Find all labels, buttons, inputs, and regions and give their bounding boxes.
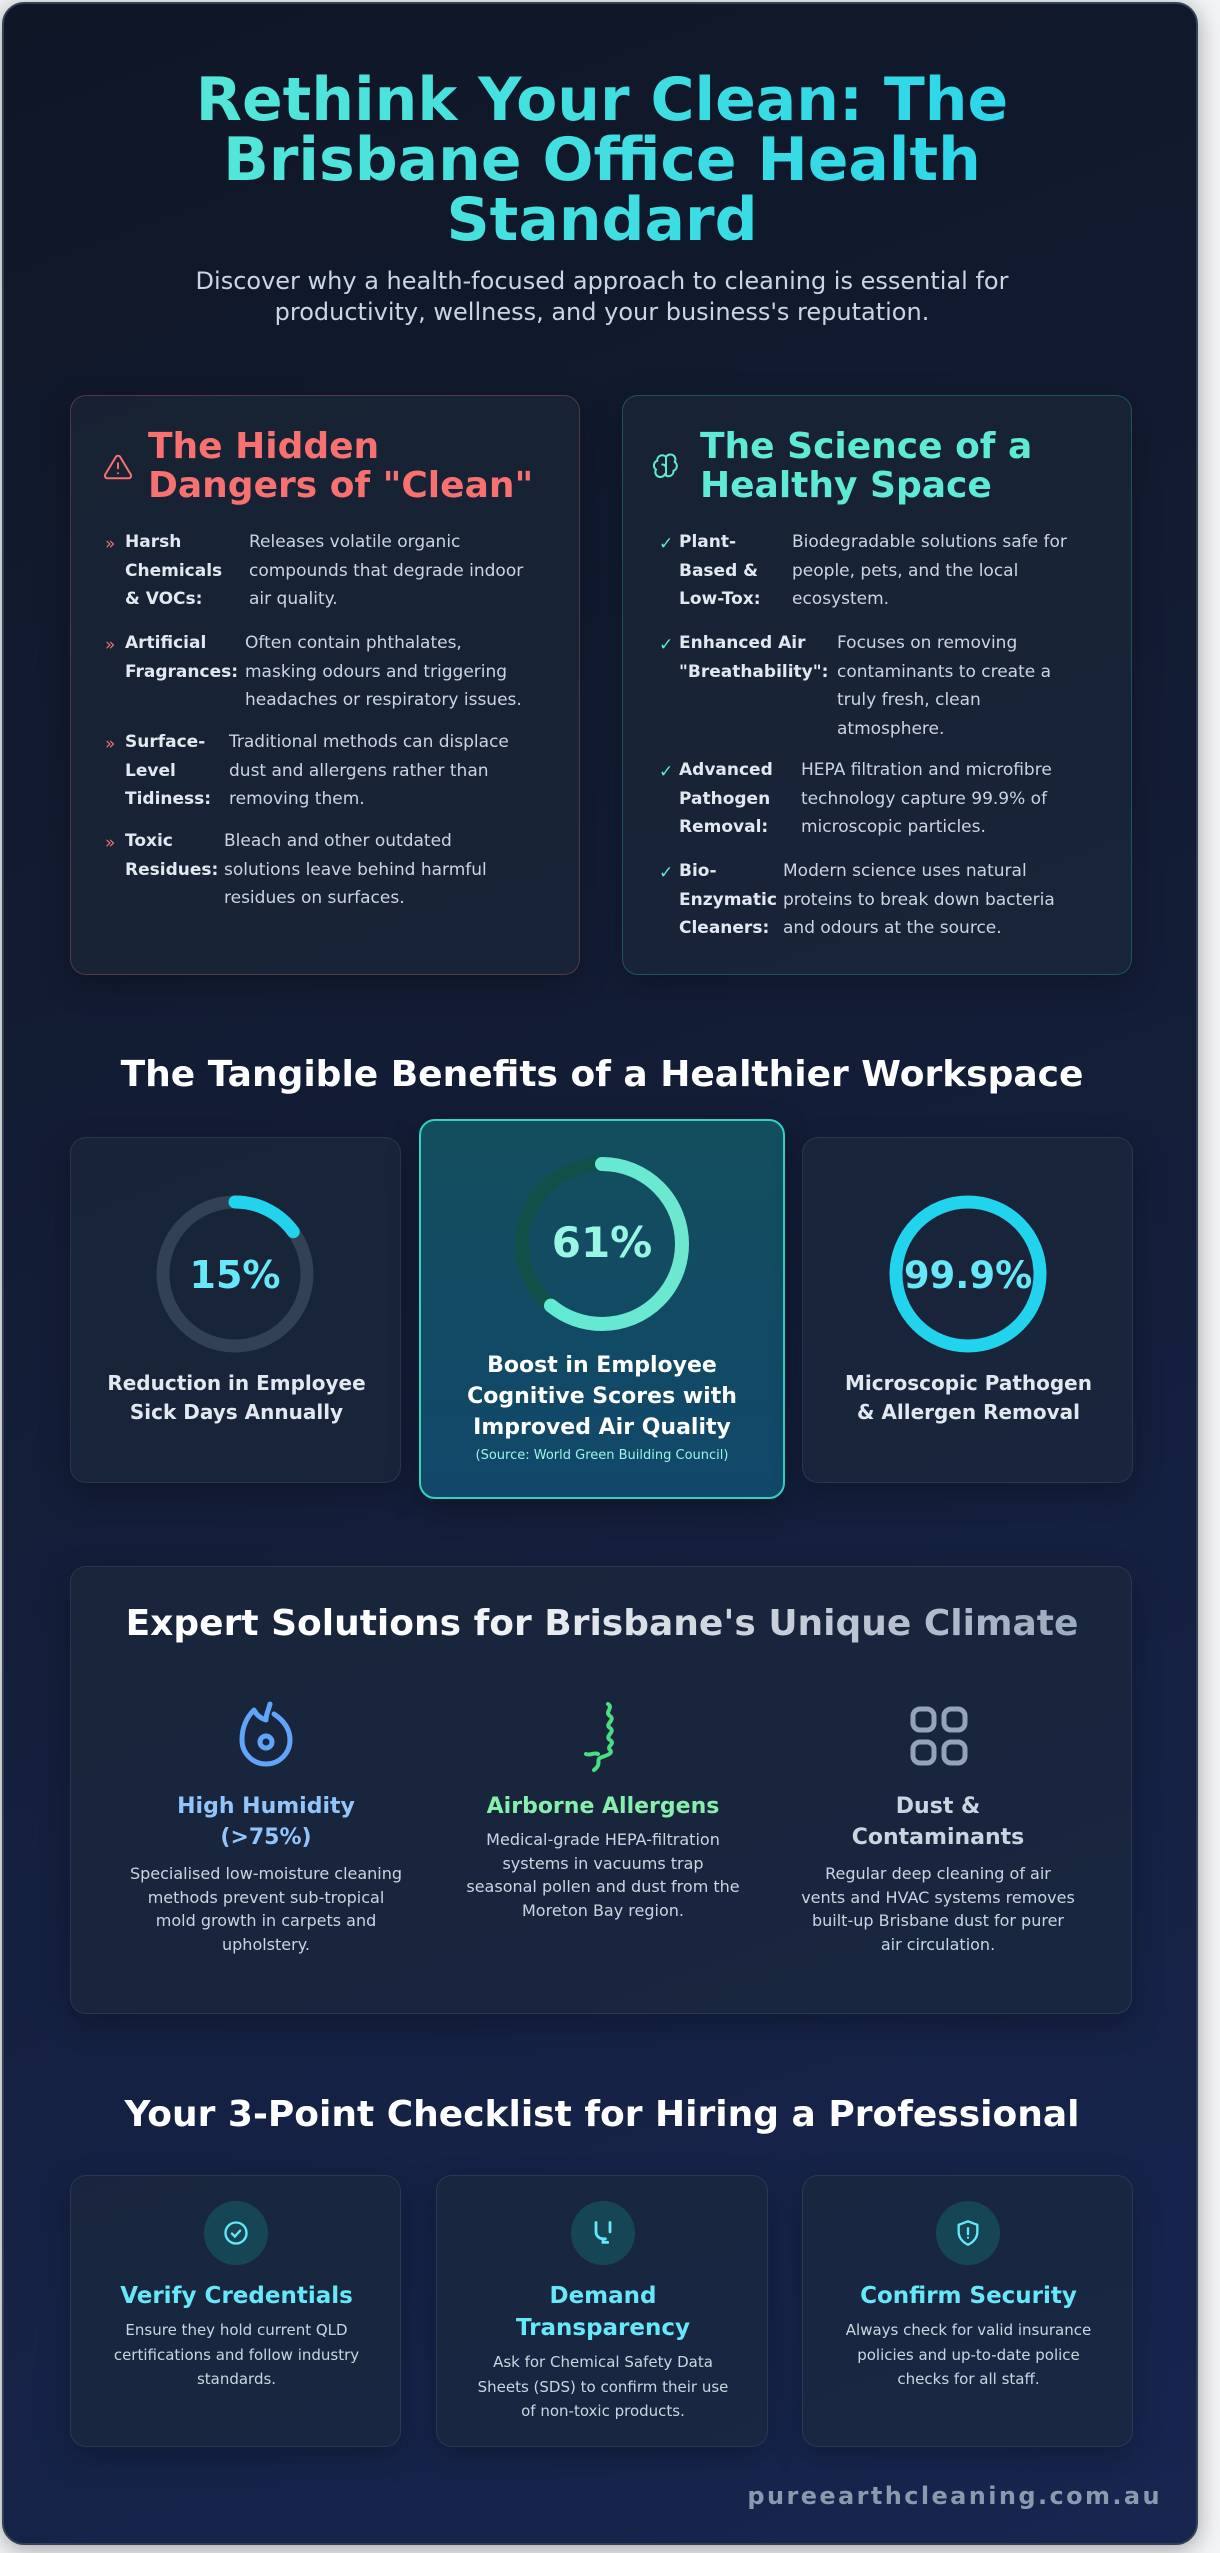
title xyxy=(516,2283,690,2341)
item: toxic residues xyxy=(105,831,487,908)
label: Boost in Employee xyxy=(487,1353,717,1378)
description: Always check for valid insurance xyxy=(846,2321,1091,2339)
item: toxic residues: residues on surfaces. xyxy=(224,888,405,908)
subtitle: Discover why a health-focused approach to cleaning is essential for xyxy=(196,267,1008,295)
column: high humidity xyxy=(130,1702,402,1954)
item: artificial fragrances: Artificial xyxy=(125,633,206,653)
description: Ask for Chemical Safety Data xyxy=(493,2353,713,2371)
item: plant-based: Plant- xyxy=(679,532,736,552)
description: systems in vacuums trap xyxy=(502,1854,704,1872)
title xyxy=(852,1794,1024,1850)
item: bio-enzymatic: Bio- xyxy=(679,861,717,881)
description: upholstery. xyxy=(222,1934,310,1954)
item: harsh chemicals: » xyxy=(105,534,115,554)
item: pathogen removal: Advanced xyxy=(679,760,773,780)
description: of non-toxic products. xyxy=(521,2402,685,2420)
item: breathability: contaminants to create a xyxy=(837,662,1051,682)
item: plant-based: Biodegradable solutions safe for xyxy=(792,532,1067,552)
label: Improved Air Quality xyxy=(473,1415,731,1440)
item: surface-level tidiness: » xyxy=(105,734,115,754)
title: Transparency xyxy=(516,2315,690,2341)
item: breathability: atmosphere. xyxy=(837,718,944,738)
item: plant-based: Based & xyxy=(679,560,758,580)
ring chart 61%: 61% xyxy=(552,1218,652,1267)
heading: science: Healthy Space xyxy=(700,465,992,506)
item: surface-level tidiness: removing them. xyxy=(229,789,365,809)
item: breathability: Focuses on removing xyxy=(837,633,1017,653)
description: checks for all staff. xyxy=(897,2370,1040,2388)
item: plant-based: people, pets, and the local xyxy=(792,560,1018,580)
label xyxy=(107,1371,366,1424)
subtitle xyxy=(196,267,1008,326)
item: harsh chemicals: air quality. xyxy=(249,589,338,609)
item: artificial fragrances: masking odours and triggering xyxy=(245,662,507,682)
title: High Humidity xyxy=(177,1794,355,1819)
column: dust xyxy=(801,1706,1075,1954)
item: harsh chemicals: Chemicals xyxy=(125,560,222,580)
heading: expert solutions: Expert Solutions for Brisbane's Unique Climate xyxy=(126,1603,1078,1644)
icon: warning xyxy=(104,454,132,480)
title: Verify Credentials xyxy=(120,2283,353,2309)
panel: hidden dangers xyxy=(70,395,580,975)
item: bio-enzymatic: Enzymatic xyxy=(679,890,777,910)
item: breathability: "Breathability": xyxy=(679,662,828,682)
item: surface-level tidiness: Level xyxy=(125,760,176,780)
title xyxy=(4,70,1200,250)
item: breathability: ✓ xyxy=(659,635,673,655)
item: pathogen removal: microscopic particles. xyxy=(801,817,986,837)
check card: confirm security xyxy=(802,2175,1133,2447)
ring chart 99.9% xyxy=(890,1196,1046,1352)
description: built-up Brisbane dust for purer xyxy=(812,1911,1064,1930)
item: artificial fragrances: Fragrances: xyxy=(125,662,238,682)
item: surface-level tidiness: dust and allergens rather than xyxy=(229,760,489,780)
description xyxy=(114,2321,359,2388)
item: plant-based: ecosystem. xyxy=(792,589,889,609)
subtitle: productivity, wellness, and your business's reputation. xyxy=(275,298,929,326)
description: Sheets (SDS) to confirm their use xyxy=(478,2378,728,2396)
item: bio-enzymatic: Modern science uses natural xyxy=(783,861,1027,881)
item: artificial fragrances xyxy=(105,633,522,710)
title: Rethink Your Clean: The xyxy=(196,65,1008,135)
panel: science xyxy=(622,395,1132,975)
description: Moreton Bay region. xyxy=(522,1900,684,1920)
description xyxy=(466,1830,740,1920)
icon: squiggle xyxy=(584,1702,614,1772)
heading: science: The Science of a xyxy=(700,426,1032,467)
panel: expert solutions xyxy=(70,1566,1132,2014)
heading: hidden dangers: The Hidden xyxy=(148,426,379,467)
item: bio-enzymatic: and odours at the source. xyxy=(783,918,1002,938)
description: Ensure they hold current QLD xyxy=(125,2321,348,2339)
title: Airborne Allergens xyxy=(487,1794,719,1819)
item: artificial fragrances: » xyxy=(105,635,115,655)
description: Specialised low-moisture cleaning xyxy=(130,1864,402,1883)
description: air circulation. xyxy=(881,1934,995,1954)
heading: checklist: Your 3-Point Checklist for Hiring a Professional xyxy=(125,2094,1079,2135)
column: airborne allergens xyxy=(466,1702,740,1920)
title: Demand xyxy=(549,2283,656,2309)
description: certifications and follow industry xyxy=(114,2346,359,2364)
item: bio-enzymatic xyxy=(659,861,1055,938)
item: surface-level tidiness xyxy=(105,732,509,809)
ring chart 15%: 15% xyxy=(190,1253,280,1297)
label: Microscopic Pathogen xyxy=(845,1371,1092,1395)
title: Brisbane Office Health xyxy=(223,125,981,195)
stat card: 15% xyxy=(70,1137,401,1483)
item: pathogen removal: HEPA filtration and microfibre xyxy=(801,760,1052,780)
label: & Allergen Removal xyxy=(857,1400,1080,1424)
check card: verify credentials xyxy=(70,2175,401,2447)
label: Cognitive Scores with xyxy=(467,1384,737,1409)
source note: (Source: World Green Building Council) xyxy=(476,1448,728,1463)
description: vents and HVAC systems removes xyxy=(801,1888,1075,1906)
item: pathogen removal: technology capture 99.9% of xyxy=(801,788,1047,808)
item: harsh chemicals: compounds that degrade indoor xyxy=(249,560,523,580)
ring chart 61% xyxy=(515,1157,689,1331)
item: artificial fragrances: headaches or respiratory issues. xyxy=(245,690,522,710)
heading: tangible benefits: The Tangible Benefits of a Healthier Workspace xyxy=(121,1054,1083,1095)
item: plant-based: Low-Tox: xyxy=(679,589,761,609)
item: artificial fragrances: Often contain phthalates, xyxy=(245,633,462,653)
description xyxy=(846,2321,1091,2388)
item: pathogen removal xyxy=(659,760,1052,837)
item: surface-level tidiness: Traditional methods can displace xyxy=(229,732,509,752)
icon: brain/leaf xyxy=(652,454,678,478)
item: toxic residues: Bleach and other outdated xyxy=(224,831,452,851)
check card: demand transparency xyxy=(436,2175,768,2447)
icon: grid squares xyxy=(910,1706,968,1766)
item: toxic residues: » xyxy=(105,833,115,853)
heading: hidden dangers: Dangers of "Clean" xyxy=(148,465,533,506)
item: breathability: Enhanced Air xyxy=(679,633,805,653)
description: policies and up-to-date police xyxy=(857,2346,1080,2364)
title: Contaminants xyxy=(852,1825,1024,1850)
title: Confirm Security xyxy=(860,2283,1077,2309)
item: harsh chemicals: Harsh xyxy=(125,532,181,552)
title: (>75%) xyxy=(220,1825,312,1850)
heading: hidden dangers xyxy=(148,426,533,506)
icon: shield xyxy=(936,2201,1000,2265)
description: mold growth in carpets and xyxy=(156,1911,376,1930)
item: breathability: truly fresh, clean xyxy=(837,690,981,710)
description: Medical-grade HEPA-filtration xyxy=(486,1830,720,1849)
description xyxy=(801,1864,1075,1954)
item: surface-level tidiness: Surface- xyxy=(125,732,205,752)
item: pathogen removal: Removal: xyxy=(679,817,768,837)
item: bio-enzymatic: Cleaners: xyxy=(679,918,769,938)
label: Sick Days Annually xyxy=(130,1400,343,1424)
label: Reduction in Employee xyxy=(107,1371,366,1395)
item: bio-enzymatic: proteins to break down bacteria xyxy=(783,890,1055,910)
icon: flame/drop xyxy=(240,1702,292,1766)
title: Dust & xyxy=(896,1794,980,1819)
item: toxic residues: solutions leave behind harmful xyxy=(224,860,487,880)
item: pathogen removal: Pathogen xyxy=(679,788,770,808)
stat card: 99.9% xyxy=(802,1137,1133,1483)
description xyxy=(478,2353,728,2420)
icon: check badge xyxy=(204,2201,268,2265)
item: plant-based: ✓ xyxy=(659,534,673,554)
footer: website: pureearthcleaning.com.au xyxy=(747,2482,1162,2510)
description: Regular deep cleaning of air xyxy=(825,1864,1051,1883)
item: toxic residues: Residues: xyxy=(125,860,218,880)
item: breathability xyxy=(659,633,1051,738)
item: harsh chemicals: Releases volatile organic xyxy=(249,532,460,552)
description xyxy=(130,1864,402,1954)
label xyxy=(467,1353,737,1440)
label xyxy=(845,1371,1092,1424)
title xyxy=(177,1794,355,1850)
item: bio-enzymatic: ✓ xyxy=(659,863,673,883)
item: surface-level tidiness: Tidiness: xyxy=(125,789,211,809)
description: methods prevent sub-tropical xyxy=(148,1888,384,1906)
icon: headset xyxy=(571,2201,635,2265)
ring chart 99.9%: 99.9% xyxy=(904,1254,1032,1297)
description: seasonal pollen and dust from the xyxy=(466,1877,740,1896)
item: plant-based xyxy=(659,532,1067,609)
item: harsh chemicals: & VOCs: xyxy=(125,589,202,609)
stat card: 61% highlighted xyxy=(419,1119,785,1499)
item: toxic residues: Toxic xyxy=(125,831,173,851)
item: pathogen removal: ✓ xyxy=(659,762,673,782)
heading: science xyxy=(700,426,1032,506)
item: harsh chemicals xyxy=(105,532,524,609)
title: Standard xyxy=(446,185,758,255)
ring chart 15% xyxy=(156,1196,314,1352)
description: standards. xyxy=(197,2370,276,2388)
